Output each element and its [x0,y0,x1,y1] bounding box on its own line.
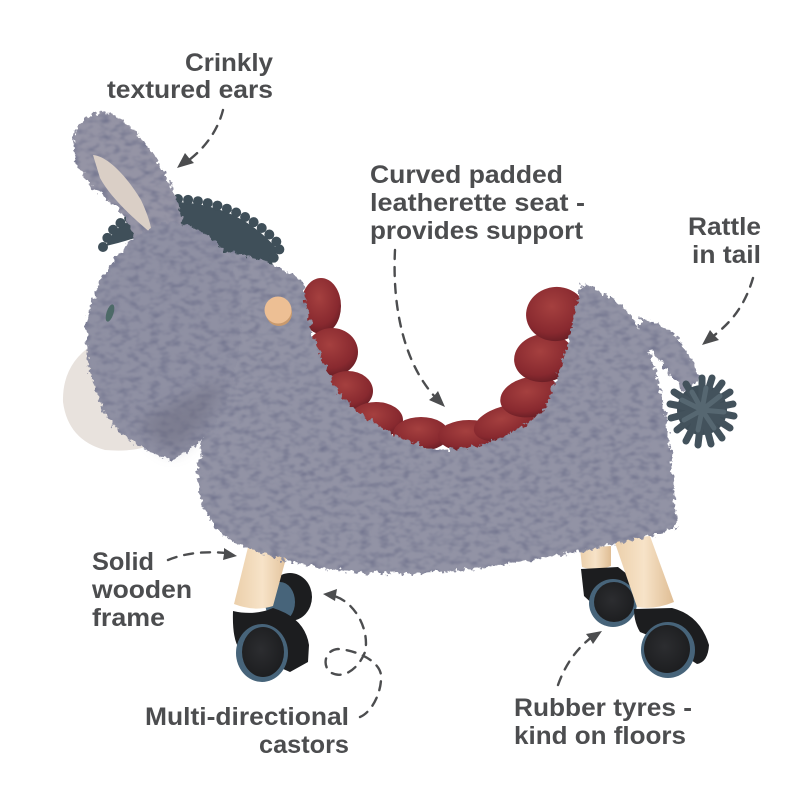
head [86,222,241,460]
label: multi-directional castors [145,703,349,759]
label: multi-directional castors: castors [259,731,349,759]
label: curved padded seat: Curved padded [370,161,563,189]
label: multi-directional castors: Multi-directional [145,703,349,731]
arrow: to ears [177,110,223,168]
label: rattle in tail: Rattle [688,213,761,241]
label: crinkly textured ears: Crinkly [185,49,273,77]
label: solid wooden frame: Solid [92,548,154,576]
label: solid wooden frame: wooden [91,576,192,604]
donkey ride-on toy [63,113,734,682]
head shadow [140,380,222,452]
eye [104,303,116,323]
label: curved padded seat: leatherette seat - [370,189,585,217]
label: rubber tyres [514,694,692,750]
arrow: to seat [395,250,445,407]
label: crinkly textured ears: textured ears [107,76,273,104]
label: curved padded seat [370,161,585,245]
ear inner lining [93,155,152,234]
arrow: to frame [168,548,237,560]
wooden handle peg [264,296,292,326]
label: rubber tyres: kind on floors [514,722,686,750]
tail pompom [670,378,734,445]
leatherette seat cushions [301,278,589,452]
label: curved padded seat: provides support [370,217,584,245]
arrow: looped to castors [323,589,381,717]
fluffy body [198,250,676,574]
label: rattle in tail: in tail [692,241,761,269]
arrow: to tail [702,278,753,345]
label: rattle in tail [688,213,761,269]
front wooden leg and castor [233,535,312,682]
label: solid wooden frame [91,548,192,632]
mane [103,199,281,268]
arrow: to tyres [558,631,602,685]
seat backing [322,325,556,440]
label: rubber tyres: Rubber tyres - [514,694,692,722]
muzzle [63,345,145,451]
tail [640,318,700,392]
rear wooden legs and castors [580,536,709,678]
label: solid wooden frame: frame [92,604,165,632]
label: crinkly textured ears [107,49,273,104]
ear [74,113,186,244]
